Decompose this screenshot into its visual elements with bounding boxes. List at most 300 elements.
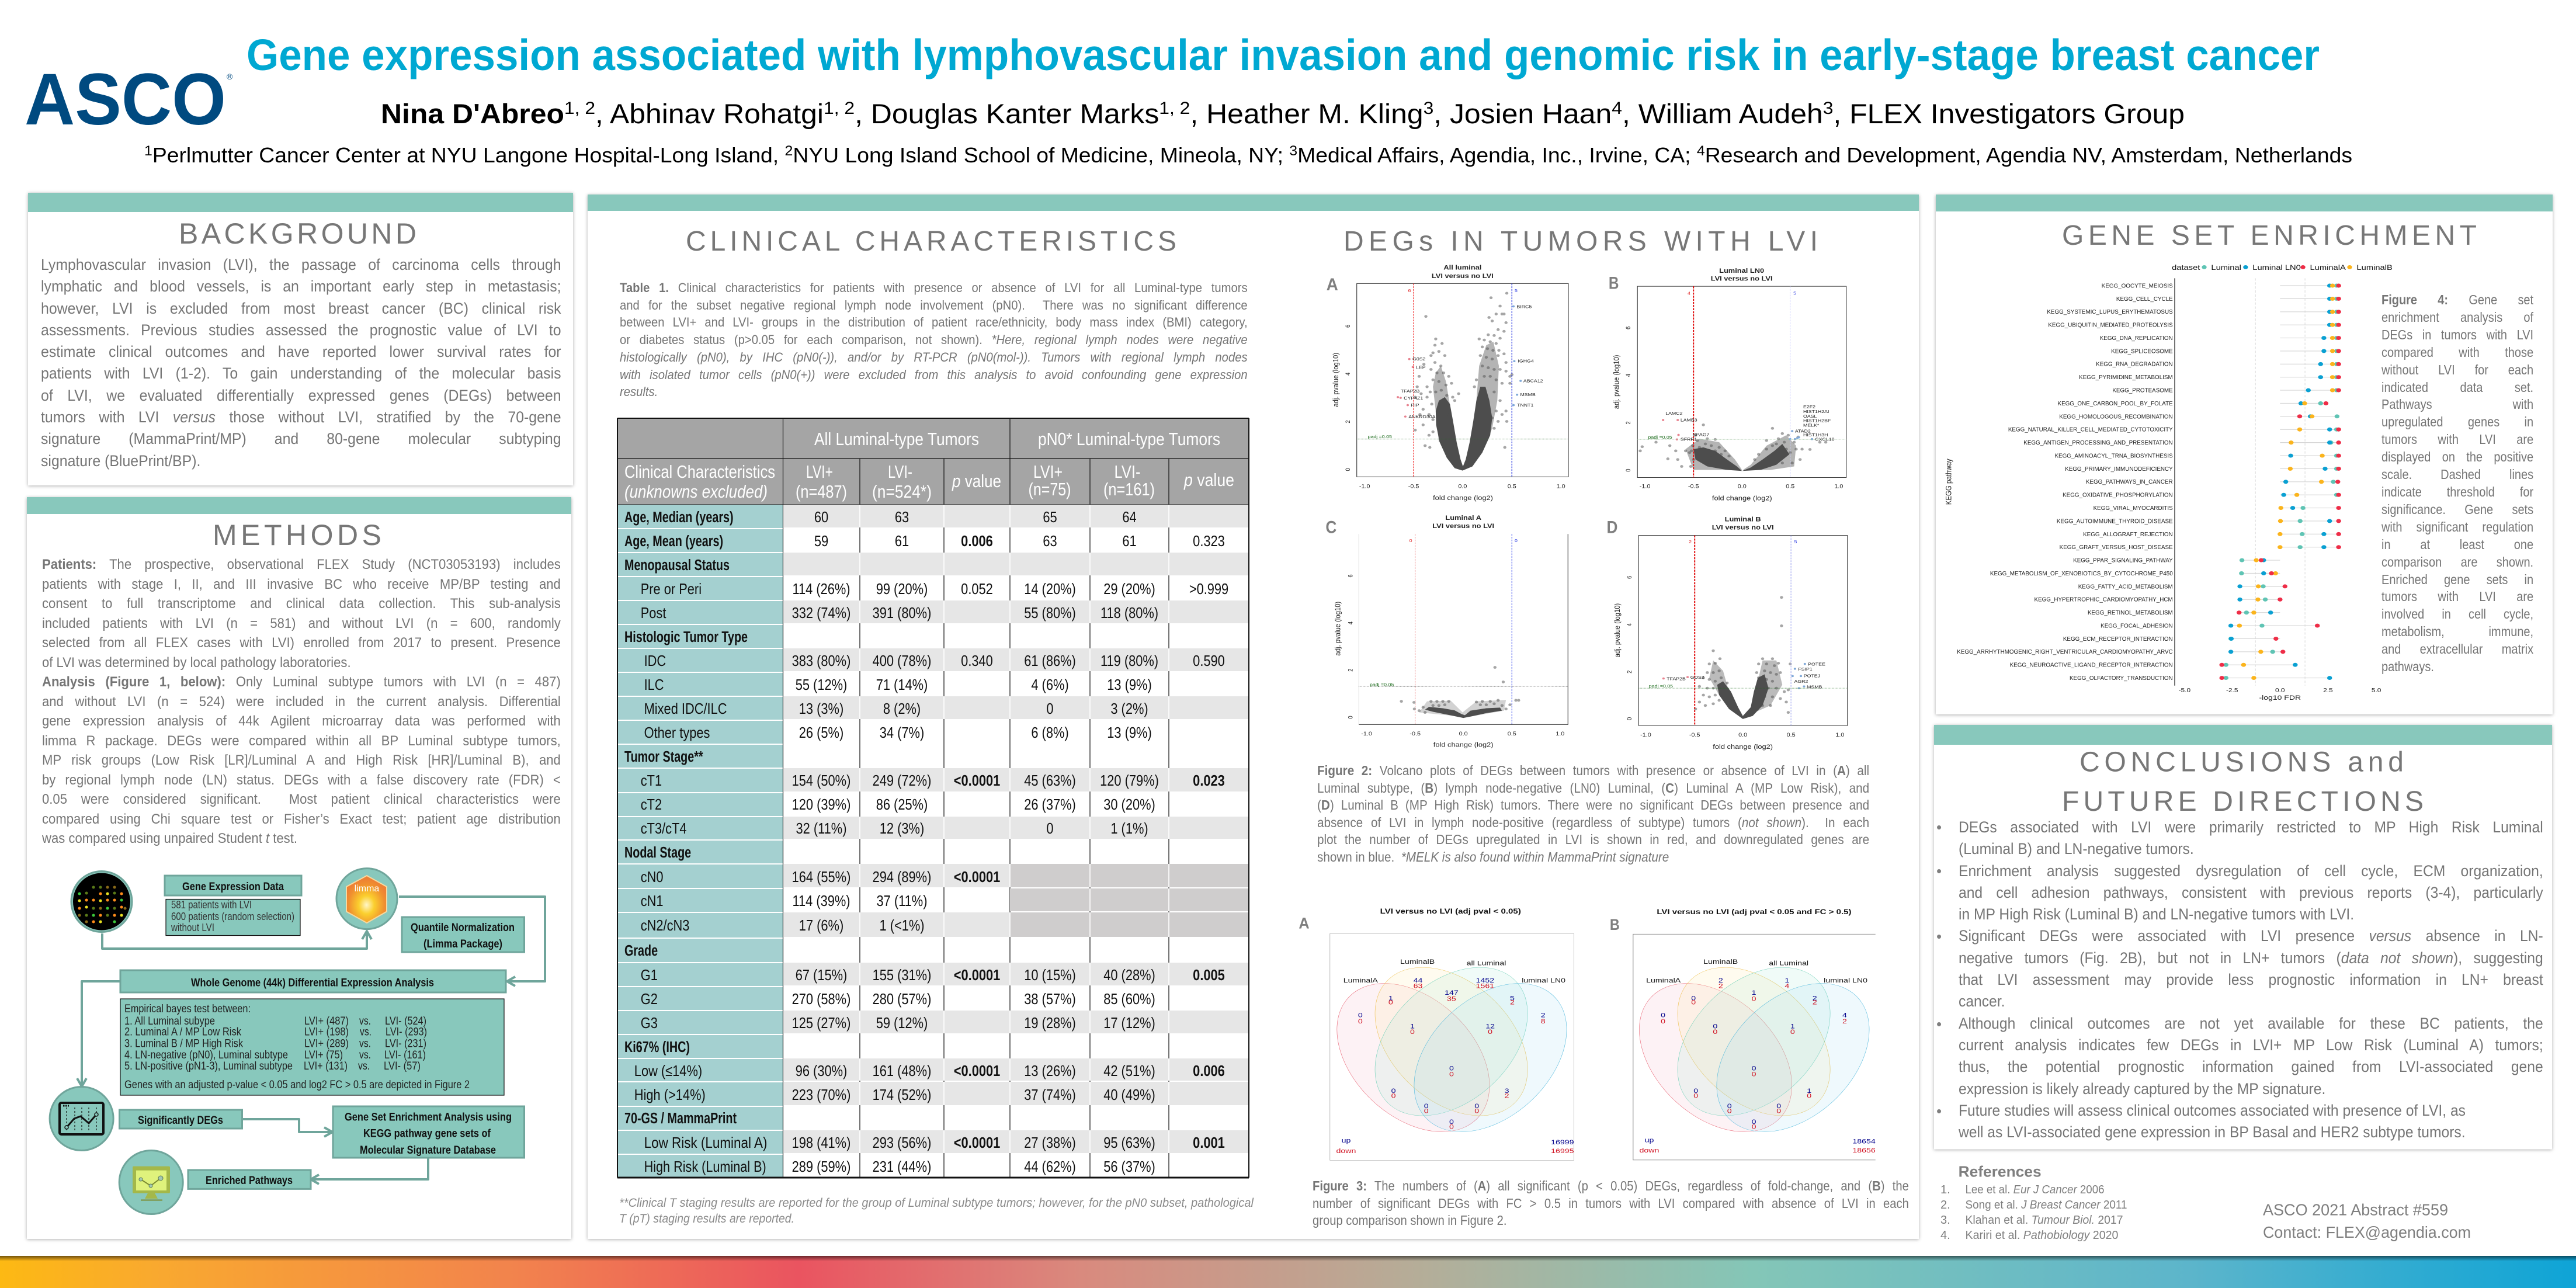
chart row labels: KEGG_NATURAL_KILLER_CELL_MEDIATED_CYTOTOXICITY: [2008, 426, 2173, 433]
table row label column: cN0: [641, 869, 664, 886]
chart row labels: KEGG_RETINOL_METABOLISM: [2088, 610, 2173, 616]
table column: all luminal p value: 0.052: [961, 581, 993, 598]
volcano plot A: all luminal: 0.5: [1508, 484, 1516, 489]
volcano plot A: all luminal: -0.5: [1408, 484, 1419, 489]
volcano plot A: all luminal: fold change (log2): [1433, 494, 1493, 502]
venn diagram B: significant DEGs with FC above 0.5: 0: [1776, 1102, 1781, 1109]
volcano plot D: luminal B: POTEE: [1808, 662, 1825, 666]
table row label column: Ki67% (IHC): [624, 1038, 690, 1056]
chart row labels: KEGG_ALLOGRAFT_REJECTION: [2083, 532, 2173, 538]
chart legend: Luminal LN0: [2252, 263, 2301, 272]
table column: pN0 LVI-: 61: [1122, 533, 1137, 550]
text: background: lymphatic and blood vessels, is an important early step in metastasis;: [41, 277, 561, 295]
volcano plot C: luminal A: 0.0: [1459, 731, 1468, 737]
text: figure 3 caption: [1313, 1178, 1909, 1233]
volcano plot D: luminal B: 0: [1627, 717, 1633, 720]
table column: pN0 LVI+: 0: [1046, 700, 1054, 717]
text: methods: gene expression analysis of 44k Agilent microarray data was performed with: [42, 713, 561, 729]
venn diagram B: significant DEGs with FC above 0.5: 2: [1813, 994, 1817, 1002]
venn diagram A: all significant DEGs: 12: [1485, 1022, 1495, 1030]
table column: pN0 LVI-: 3 (2%): [1110, 700, 1148, 717]
venn diagram B: significant DEGs with FC above 0.5: B: [1610, 916, 1620, 933]
box: empirical bayes comparisons: LVI- (57): [384, 1060, 421, 1072]
text: figure 4 caption: upregulated genes in: [2381, 414, 2533, 429]
table column: pN0 LVI-: 13 (9%): [1107, 724, 1152, 741]
table column: all luminal LVI-: 174 (52%): [873, 1086, 931, 1103]
table column: all luminal LVI-: 71 (14%): [876, 676, 928, 693]
box: quantile normalization: [402, 917, 525, 952]
box: quantile normalization: (Limma Package): [423, 938, 502, 950]
text: figure 4 caption: tumors with LVI are: [2381, 589, 2533, 604]
text: methods: was compared using unpaired Student t test.: [42, 831, 297, 846]
box: whole genome differential expression analysis: Whole Genome (44k) Differential Expression Analysis: [191, 977, 434, 990]
chart row labels: KEGG_ANTIGEN_PROCESSING_AND_PRESENTATION: [2023, 440, 2173, 446]
title: Gene expression associated with lymphovascular invasion and genomic risk in early-stage breast cancer: [247, 30, 2320, 79]
table header: p value: [952, 471, 1001, 491]
table column: all luminal LVI-: 12 (3%): [880, 820, 924, 837]
table column: pN0 LVI-: 40 (49%): [1103, 1086, 1155, 1103]
table column: pN0 LVI-: 119 (80%): [1100, 652, 1158, 669]
box: empirical bayes comparisons: LVI- (293): [386, 1026, 427, 1039]
table header: (n=161): [1103, 479, 1155, 499]
table column: all luminal LVI-: 99 (20%): [876, 581, 928, 598]
chart row labels: KEGG_ARRHYTHMOGENIC_RIGHT_VENTRICULAR_CARDIOMYOPATHY_ARVC: [1957, 649, 2173, 655]
bullets: •: [1936, 1102, 1942, 1120]
table row label column: Age, Median (years): [624, 508, 734, 526]
volcano plot A: all luminal: -1.0: [1359, 484, 1370, 489]
references: 2.: [1940, 1199, 1950, 1211]
table column: all luminal LVI+: 383 (80%): [792, 652, 850, 669]
arrow: limma to whole genome analysis: [399, 897, 545, 986]
volcano plot B: luminal LN0: 5: [1793, 291, 1796, 296]
table row label column: Pre or Peri: [641, 581, 702, 598]
chart axes labels: 2.5: [2323, 688, 2333, 694]
box: empirical bayes comparisons: vs.: [360, 1026, 372, 1039]
volcano plot A: all luminal: [1327, 263, 1568, 502]
text: methods: patients with stage I, II, and III invasive BC who receive MP/BP testing and: [42, 576, 561, 592]
affiliations: Perlmutter Cancer Center at NYU Langone Hospital-Long Island,: [152, 143, 784, 167]
text: figure 2 caption: Figure 2: Volcano plots of DEGs between tumors with presence or absence of LVI in (A) all: [1317, 763, 1869, 778]
references: 3.: [1940, 1214, 1950, 1227]
volcano plot C: luminal A: 0: [1348, 716, 1354, 719]
arrow: whole genome analysis to DEG icon: [77, 981, 120, 1086]
table column: all luminal LVI+: 223 (70%): [792, 1086, 850, 1103]
affiliations: 4: [1697, 143, 1705, 159]
volcano plot C: luminal A: C: [1325, 517, 1336, 537]
table column: pN0 LVI+: 45 (63%): [1024, 772, 1076, 789]
volcano plot A: all luminal: 0: [1345, 468, 1352, 471]
volcano plot D: luminal B: 6: [1627, 575, 1633, 579]
table column: pN0 LVI-: [1100, 509, 1159, 1175]
venn diagram A: all significant DEGs: 1561: [1476, 982, 1494, 990]
text: conclusions: expression is likely already captured by the MP signature.: [1959, 1080, 2325, 1098]
heading: conclusions and future directions: [2062, 747, 2424, 817]
chart row labels: KEGG_OOCYTE_MEIOSIS: [2102, 283, 2173, 290]
venn diagram A: all significant DEGs: 0: [1488, 1027, 1492, 1035]
text: methods: consent to full transcriptome and clinical data collection. This sub-analysis: [42, 596, 561, 612]
heading: conclusions and future directions: CONCLUSIONS and: [2079, 747, 2404, 778]
table column: all luminal LVI-: 294 (89%): [873, 869, 931, 886]
authors: 3: [1424, 99, 1433, 118]
venn diagram B: significant DEGs with FC above 0.5: 0: [1752, 1064, 1756, 1072]
chart row labels: KEGG_GRAFT_VERSUS_HOST_DISEASE: [2060, 544, 2173, 551]
table header: LVI+: [806, 461, 833, 482]
box: empirical bayes comparisons: [120, 999, 504, 1095]
table column: all luminal LVI+: 114 (26%): [792, 581, 850, 598]
references: Lee et al. Eur J Cancer 2006: [1965, 1183, 2104, 1196]
table column: all luminal LVI+: [792, 509, 850, 1175]
text: table footnote: **Clinical T staging results are reported for the group of Luminal subtype tumors; however, for the pN0 subset, pathological: [619, 1196, 1254, 1210]
text: figure 4 caption: compared with those: [2381, 345, 2533, 360]
table column: pN0 LVI+: 61 (86%): [1024, 652, 1076, 669]
text: conclusions: current analysis indicates few DEGs in LVI+ MP Low Risk (Luminal A) tumors;: [1959, 1036, 2543, 1054]
table header: p value: [1183, 470, 1234, 490]
abstract and contact: ASCO 2021 Abstract #559: [2263, 1201, 2448, 1218]
panel: conclusions and future directions: [1934, 725, 2552, 1150]
volcano plot C: luminal A: 6: [1348, 574, 1354, 578]
table column: all luminal LVI+: 332 (74%): [792, 605, 850, 622]
venn diagram B: significant DEGs with FC above 0.5: 1: [1807, 1086, 1811, 1095]
table column: all luminal LVI+: 13 (3%): [799, 700, 843, 717]
text: table 1 caption: Table 1. Clinical characteristics for patients with presence or absence of LVI for all Luminal-type tumors: [620, 280, 1248, 295]
volcano plot D: luminal B: [1607, 515, 1848, 751]
chart legend: LuminalA: [2310, 263, 2346, 272]
authors: 1, 2: [824, 99, 855, 118]
chart row labels: KEGG_AUTOIMMUNE_THYROID_DISEASE: [2057, 518, 2173, 525]
venn diagram B: significant DEGs with FC above 0.5: down: [1640, 1147, 1659, 1154]
text: methods: limma R package. DEGs were compared within all BP Luminal subtype tumors,: [42, 732, 561, 749]
chart row labels: KEGG_PPAR_SIGNALING_PATHWAY: [2073, 557, 2173, 564]
box: whole genome differential expression analysis: [120, 970, 506, 992]
text: figure 4 caption: [2381, 291, 2533, 689]
chart axes labels: 0.0: [2275, 688, 2285, 694]
chart legend: Luminal: [2211, 263, 2241, 272]
box: patient counts: without LVI: [171, 922, 214, 933]
volcano plot C: luminal A: 2: [1348, 668, 1354, 672]
volcano plot C: luminal A: 1.0: [1556, 731, 1565, 737]
venn diagram B: significant DEGs with FC above 0.5: 1: [1752, 989, 1756, 997]
abstract and contact: Contact: FLEX@agendia.com: [2263, 1223, 2471, 1241]
text: background: Lymphovascular invasion (LVI), the passage of carcinoma cells through: [41, 256, 561, 273]
table column: all luminal LVI-: 391 (80%): [873, 605, 931, 622]
volcano plot A: all luminal: A: [1327, 275, 1338, 294]
chart row labels: KEGG_AMINOACYL_TRNA_BIOSYNTHESIS: [2054, 453, 2173, 460]
volcano plot C: luminal A: Luminal A: [1445, 514, 1481, 522]
table column: all luminal p value: 0.340: [961, 652, 993, 669]
table header: LVI-: [1115, 461, 1140, 482]
table column: all luminal LVI+: 198 (41%): [792, 1134, 850, 1151]
table row label column: G3: [641, 1015, 658, 1032]
text: methods: of LVI was determined by local pathology laboratories.: [42, 654, 351, 671]
text: figure 3 caption: number of significant DEGs with FC > 0.5 in tumors with LVI compared with absence of LVI in each: [1313, 1196, 1909, 1211]
venn diagram B: significant DEGs with FC above 0.5: 18656: [1852, 1147, 1876, 1154]
volcano plot B: luminal LN0: SFRP1: [1681, 437, 1697, 442]
authors: 1, 2: [564, 99, 595, 118]
table column: all luminal LVI-: 61: [895, 533, 909, 550]
volcano plot B: luminal LN0: HIST1H2AI: [1803, 409, 1829, 414]
table column: all luminal LVI+: 164 (55%): [792, 869, 850, 886]
table column: pN0 LVI-: 120 (79%): [1100, 772, 1159, 789]
table row label column: Tumor Stage**: [624, 748, 703, 765]
text: figure 4 caption: indicate threshold for: [2381, 484, 2533, 499]
box: empirical bayes comparisons: Genes with an adjusted p-value < 0.05 and log2 FC > 0.5 are depicted in Figure 2: [124, 1079, 470, 1091]
text: figure 4 caption: enrichment analysis of: [2381, 310, 2533, 325]
venn diagram B: significant DEGs with FC above 0.5: 2: [1719, 982, 1723, 990]
venn diagram A: all significant DEGs: 1: [1410, 1022, 1415, 1030]
text: figure 4 caption: metabolism, immune,: [2381, 624, 2533, 639]
venn diagram A: all significant DEGs: 16995: [1551, 1147, 1574, 1155]
volcano plot B: luminal LN0: -1.0: [1640, 484, 1651, 489]
volcano plot D: luminal B: 2: [1689, 540, 1692, 544]
table column: pN0 LVI-: 40 (28%): [1103, 967, 1155, 984]
affiliations: 2: [784, 143, 793, 159]
box: empirical bayes comparisons: 3. Luminal B / MP High Risk: [124, 1038, 243, 1050]
table column: all luminal LVI+: 26 (5%): [799, 724, 843, 741]
table column: all luminal LVI+: 120 (39%): [792, 796, 850, 813]
table column: all luminal LVI-: 86 (25%): [876, 796, 928, 813]
authors: , Abhinav Rohatgi: [595, 98, 824, 129]
authors: 1, 2: [1159, 99, 1190, 118]
volcano plot D: luminal B: GDS2: [1690, 675, 1704, 680]
venn diagram A: all significant DEGs: 16999: [1551, 1138, 1574, 1145]
text: figure 4 caption: significance. Gene sets: [2381, 502, 2533, 517]
authors: , Douglas Kanter Marks: [855, 98, 1159, 129]
chart axes labels: -log10 FDR: [2259, 693, 2301, 702]
table column: all luminal LVI-: 155 (31%): [873, 967, 931, 984]
text: conclusions: and cell adhesion pathways, consistent with previous reports (3-4), particularly: [1959, 884, 2543, 901]
affiliations: NYU Long Island School of Medicine, Mineola, NY;: [793, 143, 1289, 167]
affiliations: Research and Development, Agendia NV, Amsterdam, Netherlands: [1705, 143, 2352, 167]
text: background: tumors with LVI versus those without LVI, stratified by the 70-gene: [41, 408, 561, 426]
volcano plot A: all luminal: TNNT1: [1517, 402, 1534, 408]
table column: pN0 p value: 0.323: [1193, 533, 1225, 550]
logo: ASCO: ASCO: [25, 59, 226, 140]
text: methods: MP risk groups (Low Risk [LR]/Luminal A and High Risk [HR]/Luminal B), and: [42, 752, 561, 768]
table column: all luminal p value: <0.0001: [954, 869, 1000, 886]
volcano plot A: all luminal: G0S2: [1412, 357, 1426, 362]
text: table 1 caption: [620, 279, 1248, 405]
table column: all luminal LVI+: 289 (59%): [792, 1158, 850, 1175]
box: empirical bayes comparisons: LVI- (524): [385, 1015, 426, 1027]
figure 3: venn diagrams: [1299, 907, 1901, 1160]
table header: (n=524*): [872, 481, 932, 502]
table row label column: Low (≤14%): [634, 1063, 702, 1079]
box: empirical bayes comparisons: LVI+ (198): [304, 1026, 349, 1039]
chart axes labels: [1944, 459, 2381, 702]
table column: pN0 LVI-: 95 (63%): [1103, 1134, 1155, 1151]
venn diagram A: all significant DEGs: 1452: [1476, 976, 1494, 984]
table column: pN0 LVI+: 44 (62%): [1024, 1158, 1076, 1175]
table row label column: cT3/cT4: [641, 820, 687, 837]
text: figure 4 caption: Figure 4: Gene set: [2381, 292, 2533, 307]
table body shading and rules: [617, 418, 1249, 1178]
table column: all luminal LVI-: 231 (44%): [873, 1158, 931, 1175]
table header: [617, 418, 1249, 505]
text: figure 2 caption: plot the number of DEGs upregulated in LVI is shown in red, and downregulated genes are: [1317, 832, 1869, 847]
box: gene expression data: [165, 876, 301, 895]
table row label column: Histologic Tumor Type: [624, 628, 748, 645]
table column: all luminal LVI-: 161 (48%): [873, 1063, 931, 1079]
venn diagram A: all significant DEGs: 5: [1510, 994, 1515, 1002]
authors: 3: [1823, 99, 1833, 118]
table row label column: cT1: [641, 772, 662, 789]
table header: (n=75): [1028, 479, 1071, 499]
table column: all luminal p value: 0.006: [961, 533, 993, 550]
volcano plot C: luminal A: 0: [1409, 538, 1412, 543]
table column: all luminal LVI-: 1 (<1%): [879, 917, 925, 934]
volcano plot B: luminal LN0: 1.0: [1834, 484, 1844, 489]
box: significantly DEGs: Significantly DEGs: [138, 1115, 223, 1127]
volcano plot A: all luminal: 0.0: [1458, 484, 1467, 489]
venn diagram B: significant DEGs with FC above 0.5: LuminalA: [1646, 976, 1681, 984]
table column: all luminal LVI+: 114 (39%): [792, 893, 850, 909]
venn diagram B: significant DEGs with FC above 0.5: 2: [1842, 1017, 1847, 1025]
references: Kariri et al. Pathobiology 2020: [1965, 1229, 2118, 1242]
venn diagram A: all significant DEGs: 8: [1541, 1017, 1546, 1025]
arrow: DEGs to gene set enrichment: [242, 1119, 332, 1137]
chart axes labels: 5.0: [2372, 688, 2381, 694]
chart row labels: KEGG_ECM_RECEPTOR_INTERACTION: [2063, 636, 2173, 643]
chart row labels: KEGG_UBIQUITIN_MEDIATED_PROTEOLYSIS: [2048, 322, 2173, 329]
table column: all luminal LVI-: 400 (78%): [873, 652, 931, 669]
text: methods: and without LVI (n = 524) were included in the current analysis. Differential: [42, 694, 561, 709]
venn diagram A: all significant DEGs: 2: [1505, 1092, 1509, 1099]
venn diagram A: all significant DEGs: 0: [1358, 1011, 1363, 1019]
text: table 1 caption: or diabetes status (p>0.05 for each comparison, not shown). *Here, regional lymph nodes were negative: [620, 332, 1248, 347]
authors: 4: [1612, 99, 1622, 118]
venn diagram B: significant DEGs with FC above 0.5: 0: [1691, 994, 1696, 1002]
text: background: assessments. Previous studies assessed the prognostic value of LVI to: [41, 321, 561, 339]
text: figure 4 caption: involved in cell cycle,: [2381, 606, 2533, 622]
volcano plot A: all luminal: BIRC5: [1516, 304, 1532, 309]
venn diagram A: all significant DEGs: up: [1342, 1137, 1351, 1144]
volcano plot C: luminal A: [1325, 514, 1568, 748]
text: background: signature (MammaPrint/MP) and 80-gene molecular subtyping: [41, 430, 561, 447]
venn diagram A: all significant DEGs: 0: [1391, 1092, 1396, 1099]
table column: pN0 LVI-: 56 (37%): [1103, 1158, 1155, 1175]
venn diagram A: all significant DEGs: 0: [1474, 1107, 1479, 1115]
text: figure 4 caption: scale. Dashed lines: [2381, 467, 2533, 482]
venn diagram B: significant DEGs with FC above 0.5: 0: [1693, 1092, 1698, 1099]
volcano plot B: luminal LN0: fold change (log2): [1712, 494, 1772, 502]
text: background: of LVI, we evaluated differentially expressed genes (DEGs) between: [41, 387, 561, 404]
table row label column: IDC: [644, 652, 666, 669]
volcano plot B: luminal LN0: ATAD2: [1795, 429, 1811, 433]
text: table footnote: [619, 1196, 1254, 1225]
text: figure 2 caption: (D) Luminal B (MP High Risk) tumors. There were no significant DEGs between presence and: [1317, 797, 1869, 813]
table column: pN0 p value: [1189, 533, 1228, 1151]
volcano plot A: all luminal: CYP4Z1: [1404, 396, 1424, 401]
box: empirical bayes comparisons: Empirical bayes test between:: [124, 1003, 251, 1015]
volcano plot B: luminal LN0: B: [1609, 273, 1619, 293]
table column: all luminal LVI+: 125 (27%): [792, 1015, 850, 1032]
panel: background: [28, 193, 573, 485]
text: methods: compared using Chi square test or Fisher’s Exact test; patient age distribution: [42, 811, 561, 827]
references: Klahan et al. Tumour Biol. 2017: [1965, 1214, 2123, 1227]
table column: pN0 LVI-: 1 (1%): [1110, 820, 1148, 837]
volcano plot D: luminal B: Luminal B: [1725, 515, 1761, 523]
volcano plot C: luminal A: 0: [1515, 538, 1518, 543]
table row label column: Grade: [624, 942, 658, 959]
text: figure 2 caption: [1317, 762, 1869, 870]
text: conclusions: negative tumors (Fig. 2B), but not in LN+ tumors (data not shown), suggesting: [1959, 949, 2543, 967]
table column: pN0 LVI-: 30 (20%): [1103, 796, 1155, 813]
volcano plot D: luminal B: 5: [1794, 540, 1797, 544]
volcano plot D: luminal B: -0.5: [1689, 732, 1700, 738]
box: empirical bayes comparisons: LVI+ (289): [304, 1038, 349, 1050]
text: background: [41, 254, 561, 476]
venn diagram A: all significant DEGs: 0: [1358, 1017, 1363, 1025]
box: gene set enrichment analysis: Gene Set Enrichment Analysis using: [345, 1111, 512, 1124]
box: enriched pathways: Enriched Pathways: [206, 1175, 293, 1187]
chart legend: [2172, 263, 2393, 272]
venn diagram A: all significant DEGs: 0: [1449, 1070, 1454, 1078]
heading: clinical characteristics: CLINICAL CHARACTERISTICS: [686, 226, 1176, 257]
table header: Clinical Characteristics: [624, 461, 775, 482]
box: quantile normalization: Quantile Normalization: [411, 922, 515, 934]
volcano plot C: luminal A: adj. pvalue (log10): [1334, 602, 1342, 655]
venn diagram A: all significant DEGs: 0: [1410, 1027, 1415, 1035]
text: figure 3 caption: Figure 3: The numbers of (A) all significant (p < 0.05) DEGs, regardless of fold-change, and (B) the: [1313, 1178, 1909, 1193]
text: conclusions: (Luminal B) and LN-negative tumors.: [1959, 840, 2193, 857]
text: background: however, LVI is excluded from most breast cancer (BC) clinical risk: [41, 300, 561, 317]
venn diagram A: all significant DEGs: 44: [1414, 976, 1422, 984]
chart axes labels: -5.0: [2179, 688, 2190, 694]
volcano plot D: luminal B: -1.0: [1640, 732, 1651, 738]
table column: pN0 LVI-: 29 (20%): [1103, 581, 1155, 598]
volcano plot D: luminal B: 0.0: [1738, 732, 1748, 738]
volcano plot D: luminal B: POTEJ: [1804, 673, 1820, 679]
table column: pN0 p value: 0.001: [1193, 1134, 1225, 1151]
table column: all luminal LVI-: 280 (57%): [873, 991, 931, 1008]
abstract and contact: [2263, 1201, 2471, 1241]
table column: pN0 LVI-: 17 (12%): [1103, 1015, 1155, 1032]
venn diagram B: significant DEGs with FC above 0.5: 0: [1752, 1117, 1756, 1125]
venn diagram A: all significant DEGs: 0: [1424, 1102, 1429, 1109]
chart row labels: KEGG_VIRAL_MYOCARDITIS: [2094, 505, 2173, 512]
table column: all luminal p value: <0.0001: [954, 967, 1000, 984]
logo: ASCO: ®: [227, 72, 233, 81]
affiliations: 1: [144, 143, 152, 159]
venn diagram A: all significant DEGs: 147: [1445, 989, 1459, 997]
table column: pN0 LVI+: 13 (26%): [1024, 1063, 1076, 1079]
text: conclusions: Future studies will assess clinical outcomes associated with presence of LVI, as: [1959, 1102, 2466, 1119]
text: background: estimate clinical outcomes and have reported lower survival rates for: [41, 343, 561, 360]
volcano plot A: all luminal: LVI versus no LVI: [1432, 272, 1494, 280]
table column: all luminal LVI-: 249 (72%): [873, 772, 931, 789]
text: methods: Analysis (Figure 1, below): Only Luminal subtype tumors with LVI (n = 487): [42, 674, 561, 690]
table column: all luminal LVI+: 96 (30%): [796, 1063, 847, 1079]
icon: limma package: [336, 869, 397, 929]
volcano plot B: luminal LN0: HIST1H2BF: [1803, 418, 1831, 423]
volcano plot A: all luminal: IGHG4: [1518, 359, 1534, 363]
venn diagram B: significant DEGs with FC above 0.5: 0: [1752, 1070, 1756, 1078]
text: table 1 caption: results.: [620, 384, 658, 399]
chart row labels: KEGG_SYSTEMIC_LUPUS_ERYTHEMATOSUS: [2047, 309, 2173, 315]
venn diagram A: all significant DEGs: 0: [1449, 1064, 1454, 1072]
text: figure 4 caption: without LVI for each: [2381, 362, 2533, 377]
volcano plot B: luminal LN0: 4: [1688, 291, 1690, 296]
venn diagram B: significant DEGs with FC above 0.5: all Luminal: [1769, 959, 1808, 967]
volcano plot A: all luminal: ABCA12: [1523, 379, 1543, 383]
text: conclusions: in MP High Risk (Luminal B) and LN-negative tumors with LVI.: [1959, 905, 2354, 923]
venn diagram A: all significant DEGs: LuminalA: [1343, 976, 1378, 984]
table column: pN0 LVI+: 14 (20%): [1024, 581, 1076, 598]
table column: all luminal LVI-: 37 (11%): [877, 893, 927, 909]
volcano plot D: luminal B: 2: [1627, 670, 1633, 673]
chart legend: dataset: [2172, 263, 2200, 272]
table column: pN0 p value: 0.023: [1193, 772, 1225, 789]
